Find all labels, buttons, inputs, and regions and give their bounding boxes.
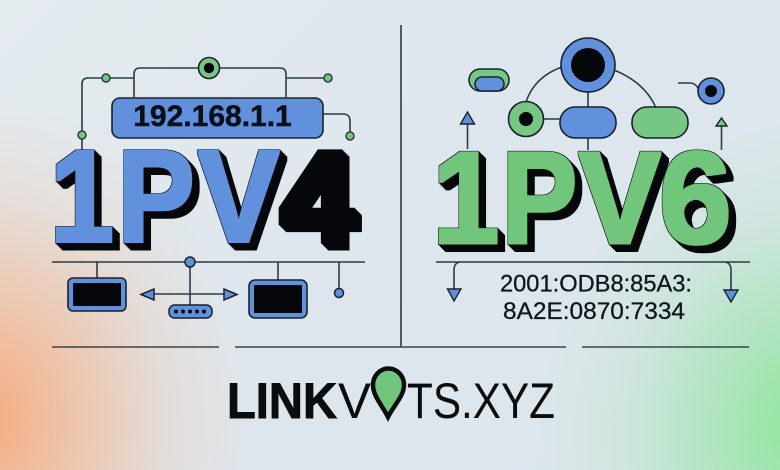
icon: small blue node [698, 78, 724, 104]
icon: map pin [373, 368, 404, 417]
network diagram: IPv6 top [460, 38, 727, 150]
icon: end node [334, 262, 344, 298]
icon: right monitor [249, 262, 307, 318]
icon: green node [508, 102, 544, 136]
arrow: up left [460, 112, 474, 149]
panel: IPv6 [432, 38, 750, 325]
heading: 1PV4: V [198, 122, 279, 269]
address box: 192.168.1.1: 192.168.1.1 [133, 100, 292, 133]
center divider [400, 25, 402, 347]
arrow: up right [716, 118, 727, 150]
heading: 1PV6 [432, 124, 732, 271]
address box: 192.168.1.1 [112, 98, 323, 138]
network baseline [436, 261, 750, 263]
icon: large node [561, 38, 615, 92]
heading: 1PV6: P [502, 124, 577, 271]
address text: IPv6: 8A2E:0870:7334 [503, 298, 685, 325]
heading: 1PV4: 1 [50, 124, 114, 270]
logo: LINKVOTS.XYZ: V [338, 373, 372, 429]
heading: 1PV4 [50, 122, 354, 270]
address text: IPv6: 2001:ODB8:85A3: [500, 270, 692, 298]
circuit diagram: IPv4 top [78, 58, 354, 150]
logo: LINKVOTS.XYZ: TS.XYZ [407, 373, 555, 429]
logo: LINKVOTS.XYZ: LINK [227, 373, 337, 429]
heading: 1PV6: V [579, 124, 661, 271]
icon: router with arrows [141, 257, 237, 318]
arrow: down left [448, 262, 461, 301]
logo: LINKVOTS.XYZ [227, 368, 555, 429]
heading: 1PV6: 1 [432, 124, 499, 271]
panel: IPv4 [50, 58, 365, 318]
lower divider lines [52, 346, 749, 348]
heading: 1PV6: 6 [659, 124, 732, 271]
icon: top node [198, 58, 220, 78]
heading: 1PV4: P [118, 124, 195, 270]
icon: nested pill [469, 69, 509, 91]
icon: left monitor [68, 262, 126, 311]
address text: IPv6 [500, 270, 692, 325]
network baseline [52, 261, 365, 263]
arrow: down right [724, 262, 738, 302]
heading: 1PV4: 4 [279, 124, 354, 270]
